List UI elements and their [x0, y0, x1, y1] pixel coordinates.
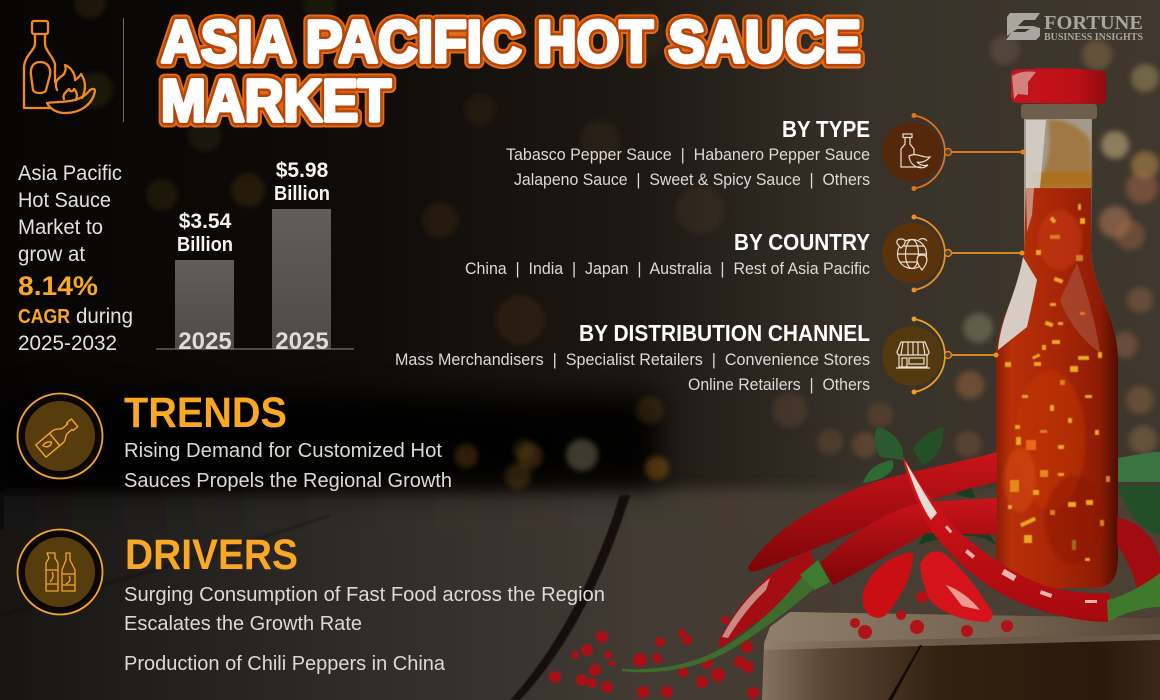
- cap and rim: [1011, 68, 1106, 119]
- trends description: Sauces Propels the Regional Growth: [124, 470, 452, 492]
- logo: Fortune Business Insights: FORTUNE: [1044, 12, 1143, 34]
- logo: Fortune Business Insights: [1006, 12, 1143, 43]
- trends block: [18, 389, 452, 492]
- segment: by distribution channel: Mass Merchandisers | Specialist Retailers | Convenience Stores: [395, 350, 870, 369]
- drivers description: Escalates the Growth Rate: [124, 613, 362, 635]
- segment: by type: Jalapeno Sauce | Sweet & Spicy Sauce | Others: [514, 170, 870, 189]
- CAGR text block: during: [76, 305, 133, 328]
- bar chart: Billion: [274, 183, 330, 205]
- title: MARKET: [161, 68, 391, 134]
- connector and badge: country: [882, 214, 1024, 292]
- segment: by country: [465, 229, 870, 278]
- drivers description: Production of Chili Peppers in China: [124, 653, 446, 675]
- bar chart: $5.98: [276, 159, 329, 182]
- bar chart: $3.54: [179, 210, 232, 233]
- bokeh lights, left: [74, 0, 724, 489]
- segment: by type: BY TYPE: [782, 116, 870, 142]
- sauce bottle photo: [996, 68, 1118, 588]
- icon: store front: [896, 342, 930, 368]
- bar chart: [156, 159, 354, 355]
- title: MARKET: [161, 68, 391, 134]
- top-left icon: bottle and flame: [24, 21, 95, 113]
- segment: by distribution channel: [395, 320, 870, 394]
- CAGR text block: CAGR: [18, 306, 70, 328]
- logo: Fortune Business Insights: BUSINESS INSIGHTS: [1044, 32, 1143, 43]
- trends description: [124, 440, 452, 492]
- segment: by country: China | India | Japan | Australia | Rest of Asia Pacific: [465, 259, 870, 278]
- segment: by type: [506, 116, 870, 189]
- icon divider: [123, 18, 124, 122]
- leaves: [863, 427, 1160, 545]
- trends heading: TRENDS: [124, 389, 287, 437]
- icon: tilted bottle: [36, 417, 80, 457]
- long green stem: [622, 572, 822, 672]
- neck speckles: [1036, 120, 1092, 186]
- drivers heading: DRIVERS: [125, 531, 298, 579]
- bar chart: Billion: [177, 234, 233, 256]
- icon: globe with pins: [897, 239, 927, 270]
- drivers description: [124, 584, 605, 675]
- bokeh lights, right: [772, 35, 1159, 458]
- drivers block: [18, 530, 605, 675]
- CAGR text block: 8.14%: [18, 271, 98, 301]
- chilies, leaves and wooden block: [622, 427, 1160, 700]
- wooden block: [762, 612, 1160, 700]
- drivers badge: [18, 530, 102, 614]
- sauce mottling: [1004, 210, 1105, 565]
- bar chart: 2025: [275, 328, 329, 355]
- segment: by country: BY COUNTRY: [734, 229, 870, 255]
- icon: sauce bottle and chili: [901, 134, 930, 168]
- connector and badge: distribution channel: [882, 316, 998, 394]
- connector and badge: type: [882, 113, 1026, 191]
- title: ASIA PACIFIC HOT SAUCE: [161, 9, 861, 75]
- bar chart: 2025: [178, 328, 232, 355]
- icon: two bottles: [46, 553, 75, 591]
- title: ASIA PACIFIC HOT SAUCE: [161, 9, 861, 75]
- CAGR text block: grow at: [18, 243, 85, 266]
- segment: by distribution channel: BY DISTRIBUTION CHANNEL: [579, 320, 870, 346]
- title: ASIA PACIFIC HOT SAUCE: [161, 9, 861, 75]
- trends badge: [18, 394, 102, 478]
- CAGR text block: 2025-2032: [18, 332, 117, 355]
- trends description: Rising Demand for Customized Hot: [124, 440, 442, 462]
- sauce flecks: [1005, 204, 1110, 561]
- segment: by type: Tabasco Pepper Sauce | Habanero Pepper Sauce: [506, 145, 870, 164]
- CAGR text block: Market to: [18, 216, 103, 239]
- scattered peppercorns on table: [549, 616, 759, 699]
- peppercorns on block: [850, 591, 1013, 639]
- title: [161, 9, 861, 134]
- CAGR text block: [18, 162, 133, 355]
- back chilies: [748, 452, 997, 572]
- front chili: [903, 457, 1110, 622]
- CAGR text block: Hot Sauce: [18, 189, 111, 212]
- drivers description: Surging Consumption of Fast Food across the Region: [124, 584, 605, 606]
- CAGR text block: Asia Pacific: [18, 162, 122, 185]
- segment: by distribution channel: Online Retailers | Others: [688, 375, 870, 394]
- title: MARKET: [161, 68, 391, 134]
